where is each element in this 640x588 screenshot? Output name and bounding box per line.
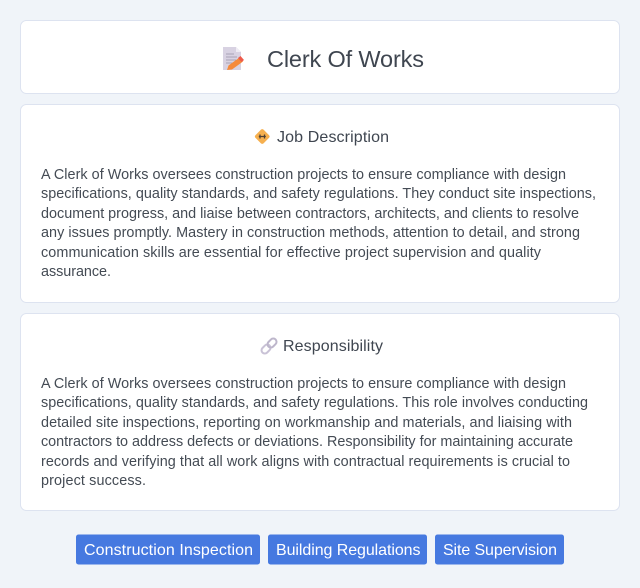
icon: construction diamond (254, 128, 270, 145)
text block: job description: A Clerk of Works oversees construction projects to ensure compliance with design (41, 167, 566, 183)
tag: construction inspection: Construction Inspection (84, 542, 253, 559)
title: Clerk Of Works (267, 46, 424, 72)
text block: responsibility: project success. (41, 473, 146, 489)
text block: job description: specifications, quality standards, and safety regulations. They conduct site inspections, (41, 186, 596, 202)
tag: building regulations (268, 534, 427, 564)
text block: job description: document progress, and liaise between contractors, architects, and clients to resolve (41, 206, 579, 222)
text block: job description: assurance. (41, 264, 111, 280)
text block: job description (41, 167, 596, 280)
tag: site supervision (435, 534, 564, 564)
tag: building regulations: Building Regulations (276, 542, 420, 559)
panel: responsibility (20, 314, 620, 510)
text block: job description: any issues promptly. Mastery in construction methods, attention to detail, and strong (41, 225, 580, 241)
text block: responsibility: A Clerk of Works oversees construction projects to ensure compliance with design (41, 376, 566, 392)
heading: job description: Job Description (277, 129, 389, 146)
heading: responsibility: Responsibility (283, 338, 383, 355)
tag: site supervision: Site Supervision (443, 542, 557, 559)
icon: chain link (260, 337, 278, 355)
text block: responsibility: contractors to address defects or deviations. Responsibility for maintaining accurate (41, 434, 573, 450)
text block: responsibility: records and verifying that all work aligns with contractual requirements is crucial to (41, 454, 570, 470)
panel: title card (20, 20, 620, 94)
text block: responsibility: detailed site inspections, reporting on workmanship and materials, and liaising with (41, 415, 572, 431)
text block: responsibility: specifications, quality standards, and safety regulations. This role involves conducting (41, 395, 588, 411)
icon: document with pencil (223, 47, 244, 70)
text block: responsibility (41, 376, 588, 489)
tag: construction inspection (76, 534, 260, 564)
text block: job description: communication skills are essential for effective project supervision and quality (41, 245, 542, 261)
panel: job description (20, 104, 620, 302)
